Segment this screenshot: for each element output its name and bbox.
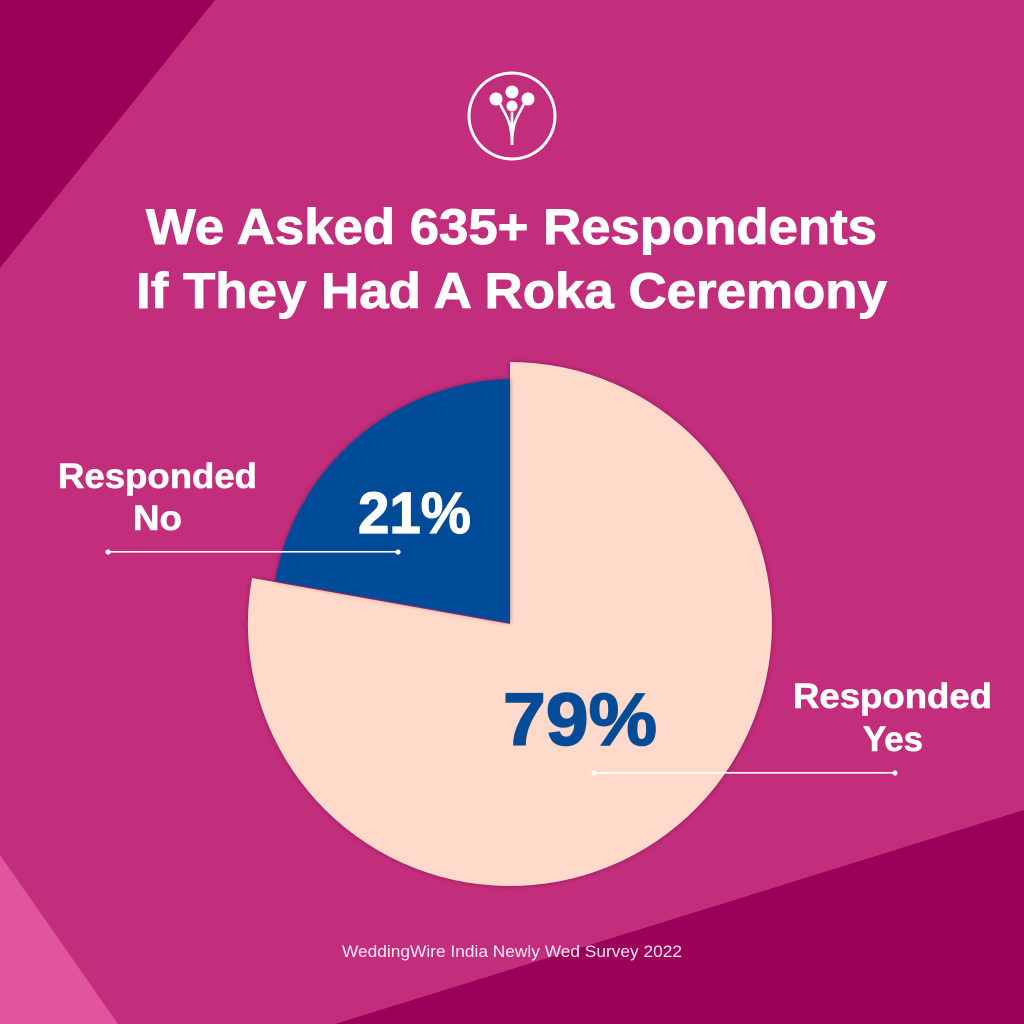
icon: bouquet logo [469, 73, 555, 159]
pie slice: responded no 21% [275, 379, 510, 623]
source footnote: WeddingWire India Newly Wed Survey 2022 [342, 942, 682, 961]
label: responded yes [793, 677, 992, 759]
label: responded yes: Yes [863, 720, 923, 759]
background shape: bottom-left light triangle [0, 855, 118, 1024]
value: 79%: 79% [503, 678, 657, 761]
pie chart [248, 362, 772, 886]
label: responded no [58, 457, 257, 538]
title: If They Had A Roka Ceremony [136, 263, 887, 319]
leader line: responded no [105, 549, 401, 555]
background shape: bottom-right dark triangle [335, 810, 1024, 1024]
value: 21%: 21% [358, 481, 471, 546]
label: responded no: No [133, 499, 182, 538]
title: We Asked 635+ Respondents [146, 199, 877, 255]
label: responded yes: Responded [793, 677, 992, 716]
label: responded no: Responded [58, 457, 257, 496]
leader line: responded yes [591, 770, 898, 776]
title [136, 199, 887, 319]
background shape: top-left dark triangle [0, 0, 215, 268]
pie slice: responded yes 79% [248, 362, 772, 886]
